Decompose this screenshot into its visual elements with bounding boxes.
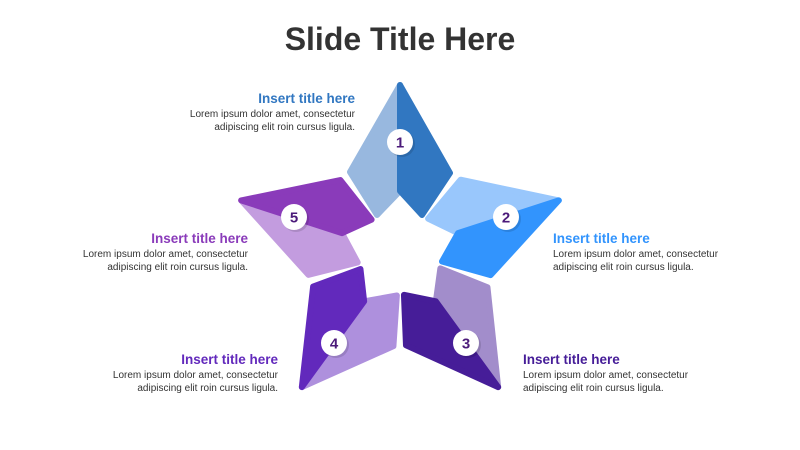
text block 5: adipiscing elit roin cursus ligula. <box>107 262 248 273</box>
badge 2 <box>493 204 521 232</box>
title: Slide Title Here <box>285 21 515 57</box>
text block 1: adipiscing elit roin cursus ligula. <box>214 122 355 133</box>
text block 3: Insert title here <box>523 352 620 367</box>
arm 4 <box>261 253 419 416</box>
text block 1: Lorem ipsum dolor amet, consectetur <box>190 109 355 120</box>
badge 5 <box>281 204 309 232</box>
badge 2: 2 <box>502 210 510 226</box>
text block 2: adipiscing elit roin cursus ligula. <box>553 262 694 273</box>
text block 5: Insert title here <box>151 231 248 246</box>
badge 5: 5 <box>290 210 298 226</box>
text block 1: Insert title here <box>258 91 355 106</box>
arm 5 <box>226 153 380 288</box>
text block 4: adipiscing elit roin cursus ligula. <box>137 383 278 394</box>
text block 2: Lorem ipsum dolor amet, consectetur <box>553 249 718 260</box>
text block 4: Insert title here <box>181 352 278 367</box>
badge 3: 3 <box>462 336 470 352</box>
badge 4: 4 <box>330 336 339 352</box>
badge 1: 1 <box>396 134 404 152</box>
text block 4 <box>113 352 278 394</box>
arm 1 <box>350 85 450 215</box>
text block 2: Insert title here <box>553 231 650 246</box>
text block 3: Lorem ipsum dolor amet, consectetur <box>523 370 688 381</box>
text block 4: Lorem ipsum dolor amet, consectetur <box>113 370 278 381</box>
arm 2 <box>420 153 574 288</box>
text block 5: Lorem ipsum dolor amet, consectetur <box>83 249 248 260</box>
badge 4 <box>321 330 349 358</box>
text block 1 <box>190 91 355 133</box>
text block 5 <box>83 231 248 273</box>
text block 3 <box>523 352 688 394</box>
badge 1 <box>387 129 415 157</box>
badge 3 <box>453 330 481 358</box>
arm 3 <box>381 253 539 416</box>
text block 3: adipiscing elit roin cursus ligula. <box>523 383 664 394</box>
text block 2 <box>553 231 718 273</box>
